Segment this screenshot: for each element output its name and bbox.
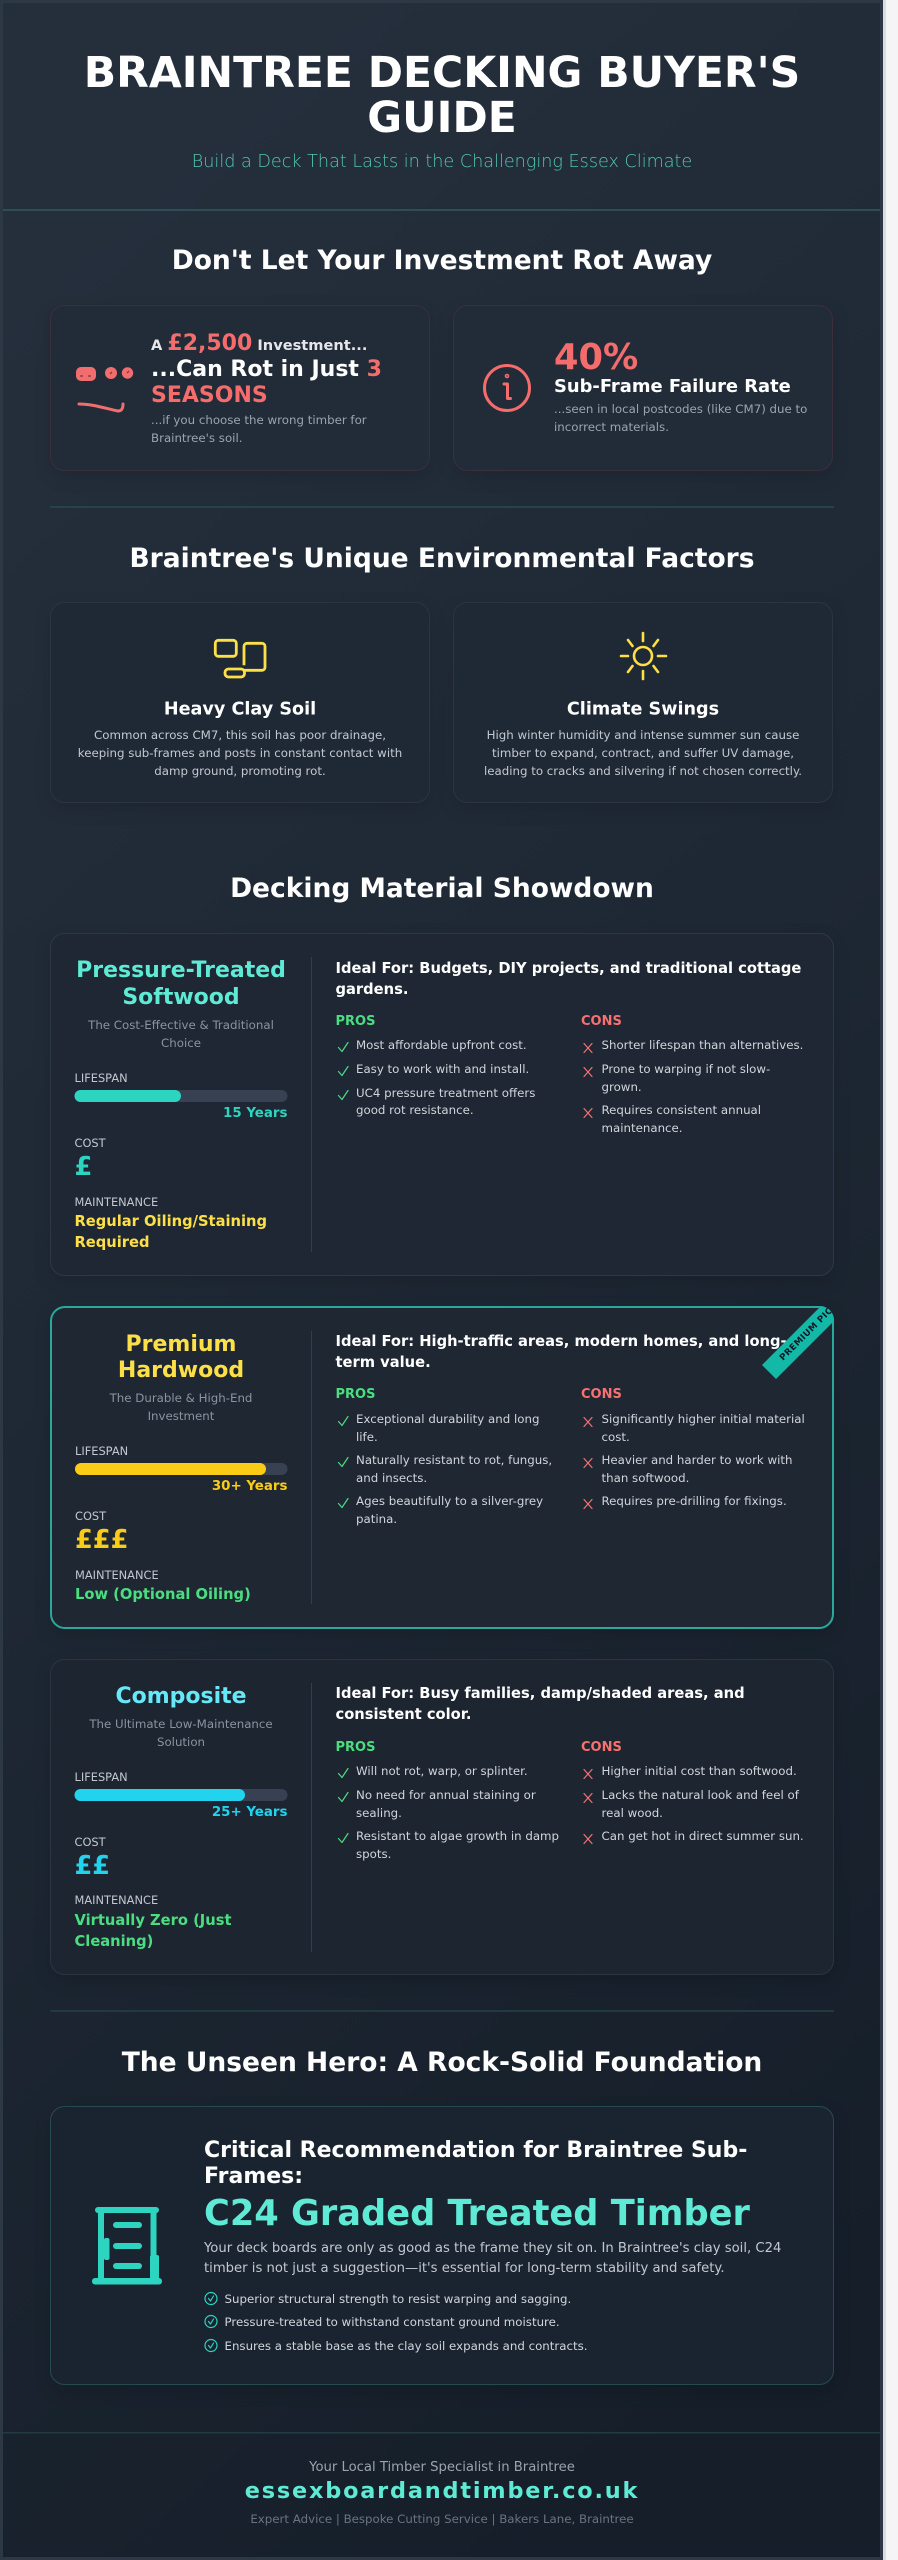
pros: patina.	[356, 1512, 397, 1526]
cons: Prone to warping if not slow-	[602, 1062, 770, 1076]
softwood summary: Regular Oiling/Staining	[74, 1213, 267, 1230]
footer	[3, 2432, 880, 2526]
softwood summary: COST	[74, 1136, 106, 1150]
climate description	[484, 728, 802, 778]
header	[84, 49, 800, 172]
lifespan bar	[74, 1090, 288, 1102]
heading: showdown: Decking Material Showdown	[230, 873, 654, 904]
failure text: ...seen in local postcodes (like CM7) due to	[554, 402, 807, 416]
climate description: timber to expand, contract, and suffer UV damage,	[492, 746, 794, 760]
cons: CONS	[581, 1014, 622, 1029]
investment text: SEASONS	[151, 383, 268, 408]
footer: Expert Advice | Bespoke Cutting Service | Bakers Lane, Braintree	[250, 2512, 634, 2526]
benefit list: Pressure-treated to withstand constant ground moisture.	[224, 2315, 560, 2329]
composite summary: ££	[74, 1851, 110, 1881]
failure text: Sub-Frame Failure Rate	[554, 376, 791, 397]
pros	[336, 1014, 535, 1117]
cons: CONS	[581, 1387, 622, 1402]
recommendation text: Frames:	[204, 2164, 303, 2189]
hardwood summary: 30+ Years	[212, 1479, 288, 1494]
softwood summary: LIFESPAN	[74, 1071, 128, 1085]
investment text: A £2,500 Investment...	[151, 331, 367, 356]
lifespan bar	[75, 1463, 288, 1475]
cons	[581, 1740, 804, 1844]
softwood summary: 15 Years	[223, 1106, 288, 1121]
panel: climate swings: Climate Swings	[567, 700, 719, 720]
hardwood summary: MAINTENANCE	[75, 1568, 159, 1582]
cons: Shorter lifespan than alternatives.	[602, 1038, 803, 1052]
composite summary: Virtually Zero (Just	[74, 1912, 232, 1929]
failure text	[554, 337, 807, 434]
hardwood summary	[75, 1332, 288, 1603]
pros: Will not rot, warp, or splinter.	[356, 1764, 528, 1778]
cons: grown.	[602, 1080, 642, 1094]
heading: environmental factors: Braintree's Unique Environmental Factors	[129, 543, 755, 574]
recommendation text: timber is not just a suggestion—it's essential for long-term stability and safety.	[204, 2261, 725, 2276]
panel: hardwood	[51, 1295, 846, 1628]
pros: Resistant to algae growth in damp	[356, 1829, 559, 1843]
icon: sun	[621, 633, 666, 679]
pros: PROS	[336, 1740, 375, 1755]
panel: climate swings	[454, 602, 832, 802]
cons: Higher initial cost than softwood.	[602, 1764, 797, 1778]
hardwood summary: Investment	[148, 1409, 215, 1423]
investment text: ...Can Rot in Just 3	[151, 357, 382, 382]
hardwood summary: Low (Optional Oiling)	[75, 1586, 251, 1603]
softwood summary: £	[74, 1152, 92, 1182]
soil description	[78, 728, 402, 778]
climate description: leading to cracks and silvering if not chosen correctly.	[484, 764, 802, 778]
pros: good rot resistance.	[356, 1103, 474, 1117]
panel: C24 recommendation	[50, 2106, 834, 2384]
composite summary: 25+ Years	[212, 1805, 288, 1820]
hardwood summary: The Durable & High-End	[109, 1391, 252, 1405]
ideal for	[336, 960, 801, 998]
ribbon: premium pick: PREMIUM PICK	[778, 1300, 841, 1363]
softwood summary	[74, 958, 288, 1251]
recommendation text: Your deck boards are only as good as the frame they sit on. In Braintree's clay soil, C24	[203, 2241, 781, 2256]
composite summary: Composite	[115, 1684, 247, 1709]
composite summary: LIFESPAN	[74, 1770, 128, 1784]
cons: Lacks the natural look and feel of	[602, 1788, 800, 1802]
composite summary	[74, 1684, 288, 1950]
ideal for: consistent color.	[336, 1706, 472, 1723]
icon: soil	[215, 640, 265, 677]
cons: cost.	[602, 1430, 630, 1444]
pros: No need for annual staining or	[356, 1788, 536, 1802]
pros: Exceptional durability and long	[356, 1412, 539, 1426]
soil description: Common across CM7, this soil has poor drainage,	[94, 728, 386, 742]
pros: PROS	[336, 1387, 375, 1402]
climate description: High winter humidity and intense summer sun cause	[487, 728, 799, 742]
soil description: damp ground, promoting rot.	[154, 764, 326, 778]
panel: softwood	[50, 934, 834, 1276]
softwood summary: Required	[74, 1234, 150, 1251]
hardwood summary: Hardwood	[118, 1358, 244, 1383]
ideal for	[336, 1685, 745, 1723]
cons: Can get hot in direct summer sun.	[602, 1829, 804, 1843]
hardwood summary: COST	[75, 1509, 106, 1523]
recommendation text: C24 Graded Treated Timber	[204, 2193, 751, 2234]
recommendation text: Critical Recommendation for Braintree Sub-	[204, 2138, 747, 2163]
pros: Most affordable upfront cost.	[356, 1038, 527, 1052]
subtitle: Build a Deck That Lasts in the Challenging Essex Climate	[192, 152, 692, 172]
investment text: Braintree's soil.	[151, 431, 242, 445]
title	[84, 49, 800, 143]
benefit list: Superior structural strength to resist warping and sagging.	[224, 2292, 571, 2306]
title: GUIDE	[367, 94, 517, 143]
cons: CONS	[581, 1740, 622, 1755]
pros: UC4 pressure treatment offers	[356, 1086, 535, 1100]
heading: rot: Don't Let Your Investment Rot Away	[172, 245, 712, 276]
panel: heavy clay soil	[50, 602, 430, 802]
lifespan bar	[74, 1789, 288, 1801]
composite summary: MAINTENANCE	[74, 1893, 158, 1907]
composite summary: The Ultimate Low-Maintenance	[88, 1717, 273, 1731]
softwood summary: Pressure-Treated	[76, 958, 286, 983]
ideal for: Ideal For: Busy families, damp/shaded areas, and	[336, 1685, 745, 1702]
cons: maintenance.	[602, 1121, 683, 1135]
recommendation text	[203, 2138, 781, 2276]
failure text: incorrect materials.	[554, 420, 669, 434]
pros	[336, 1740, 559, 1861]
cons: Requires pre-drilling for fixings.	[602, 1494, 787, 1508]
panel: heavy clay soil: Heavy Clay Soil	[164, 700, 316, 720]
ideal for	[336, 1333, 787, 1371]
hardwood summary: £££	[75, 1525, 128, 1555]
pros: spots.	[356, 1847, 391, 1861]
composite summary: Cleaning)	[74, 1933, 153, 1950]
investment text	[151, 331, 382, 445]
heading: foundation: The Unseen Hero: A Rock-Solid Foundation	[122, 2047, 762, 2078]
softwood summary: The Cost-Effective & Traditional	[87, 1018, 274, 1032]
ideal for: term value.	[336, 1354, 431, 1371]
pros: Ages beautifully to a silver-grey	[356, 1494, 543, 1508]
ideal for: gardens.	[336, 981, 408, 998]
benefit list	[205, 2292, 588, 2353]
ideal for: Ideal For: Budgets, DIY projects, and traditional cottage	[336, 960, 801, 977]
pros	[336, 1387, 552, 1526]
footer: Your Local Timber Specialist in Braintree	[308, 2460, 575, 2475]
title: BRAINTREE DECKING BUYER'S	[84, 49, 800, 98]
icon: sub-frame	[92, 2207, 162, 2284]
icon: rotting boards	[76, 367, 133, 411]
cons: Requires consistent annual	[602, 1103, 761, 1117]
panel: failure rate	[454, 306, 832, 470]
cons: Significantly higher initial material	[602, 1412, 805, 1426]
cons	[581, 1387, 805, 1508]
cons: real wood.	[602, 1806, 663, 1820]
panel: investment rot	[50, 306, 430, 470]
cons: Heavier and harder to work with	[602, 1453, 793, 1467]
hardwood summary: Premium	[126, 1332, 236, 1357]
pros: Easy to work with and install.	[356, 1062, 529, 1076]
pros: and insects.	[356, 1471, 427, 1485]
soil description: keeping sub-frames and posts in constant contact with	[78, 746, 402, 760]
composite summary: COST	[74, 1835, 106, 1849]
ideal for: Ideal For: High-traffic areas, modern homes, and long-	[336, 1333, 787, 1350]
cons: than softwood.	[602, 1471, 689, 1485]
pros: life.	[356, 1430, 378, 1444]
softwood summary: Choice	[161, 1036, 201, 1050]
softwood summary: MAINTENANCE	[74, 1195, 158, 1209]
pros: PROS	[336, 1014, 375, 1029]
benefit list: Ensures a stable base as the clay soil expands and contracts.	[224, 2339, 588, 2353]
ribbon: premium pick	[762, 1306, 834, 1379]
investment text: ...if you choose the wrong timber for	[151, 413, 367, 427]
pros: Naturally resistant to rot, fungus,	[356, 1453, 552, 1467]
cons	[581, 1014, 803, 1135]
panel: composite	[50, 1660, 834, 1974]
icon: info circle	[484, 366, 530, 410]
composite summary: Solution	[157, 1735, 205, 1749]
hardwood summary: LIFESPAN	[75, 1444, 128, 1458]
softwood summary: Softwood	[122, 985, 240, 1010]
pros: sealing.	[356, 1806, 402, 1820]
failure text: 40%	[554, 337, 638, 378]
footer: essexboardandtimber.co.uk	[245, 2478, 639, 2504]
